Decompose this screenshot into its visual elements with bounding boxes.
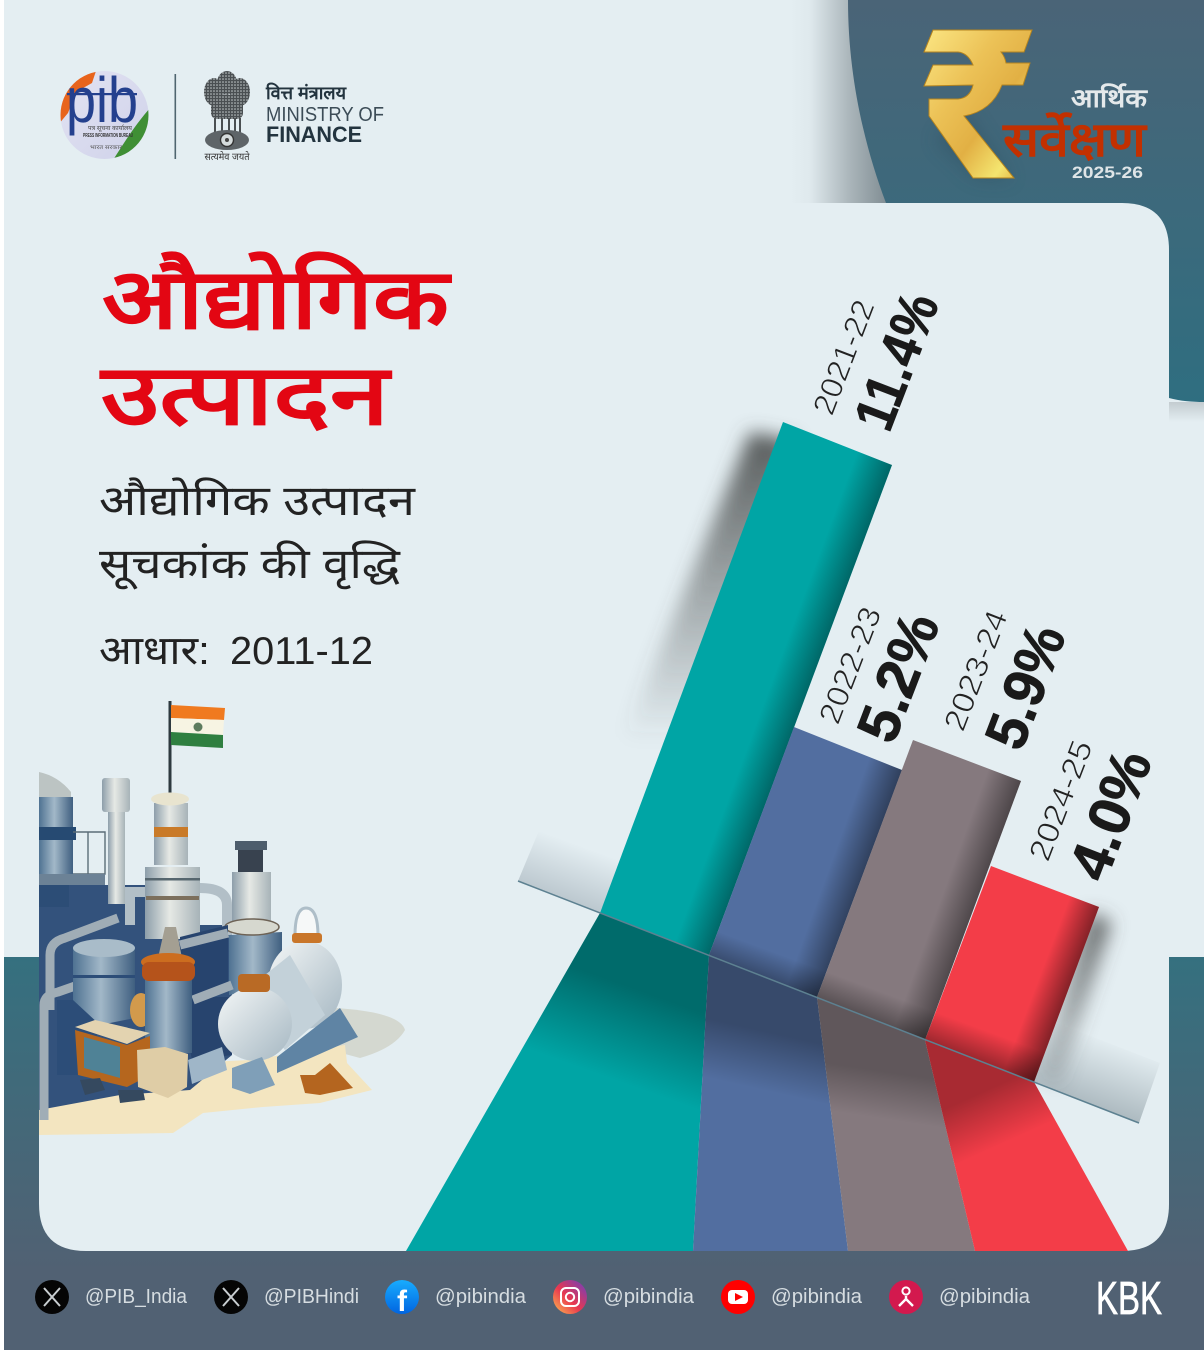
logo: PIB: पत्र सूचना कार्यालय	[88, 124, 133, 132]
base year: आधार:	[99, 629, 210, 673]
orange cloth	[300, 1063, 353, 1095]
illustration: factory with flag	[39, 701, 405, 1135]
title	[98, 251, 453, 442]
ministry name: वित्त मंत्रालय	[265, 82, 348, 103]
icon: X	[35, 1280, 69, 1314]
label: 2024-25: 2024-25	[1022, 735, 1100, 866]
pressure vessel	[218, 908, 342, 1061]
navy building	[180, 925, 232, 1060]
value: 5.9%: 5.9%	[972, 616, 1079, 758]
sand ground	[39, 1045, 372, 1135]
logo: rupee symbol	[924, 30, 1032, 180]
economic survey wordmark: आर्थिक	[1071, 83, 1148, 113]
icon: X	[214, 1280, 248, 1314]
subtitle: औद्योगिक उत्पादन	[99, 477, 416, 524]
rocks	[80, 1078, 145, 1103]
lower teal	[406, 913, 709, 1251]
lower red	[925, 1040, 1128, 1251]
ministry name: MINISTRY OF	[266, 104, 384, 126]
logo: PIB: pib	[66, 64, 138, 136]
floor shade right	[1034, 1022, 1160, 1123]
economic survey wordmark: सर्वेक्षण	[1002, 112, 1149, 167]
logo: PIB: भारत सरकार	[90, 145, 123, 151]
lower bay	[57, 1000, 97, 1075]
flag	[168, 701, 225, 799]
label: 2023-24: 2023-24	[937, 605, 1015, 736]
value: 5.2%: 5.2%	[844, 604, 952, 751]
handle: PIBHindi: @PIBHindi	[264, 1286, 359, 1308]
handle: YouTube: @pibindia	[771, 1286, 863, 1308]
right tower	[225, 841, 282, 995]
bar chart: upper bars	[600, 422, 1099, 1082]
bar 2024-25 red	[925, 866, 1099, 1082]
hut	[75, 1020, 150, 1087]
ministry name: FINANCE	[266, 122, 362, 147]
logo: PIB	[60, 71, 148, 159]
icon: Facebook: f	[397, 1285, 408, 1318]
bar 2021-22 teal	[600, 422, 892, 955]
base block	[232, 1057, 275, 1094]
logo divider	[174, 74, 176, 159]
shadow under dome strip	[1169, 402, 1204, 422]
shadow of red bar	[1040, 912, 1112, 1085]
value: 11.4%: 11.4%	[841, 283, 951, 438]
title: उत्पादन	[98, 348, 393, 442]
top right dome shadow	[812, 0, 886, 203]
rear grey pipes	[125, 888, 227, 935]
base year	[99, 629, 373, 673]
icon: YouTube	[721, 1280, 755, 1314]
ground shadow	[330, 1008, 405, 1058]
handle: Facebook: @pibindia	[435, 1286, 527, 1308]
lower blue	[693, 955, 848, 1251]
icon: Facebook	[385, 1280, 419, 1318]
handle: Instagram: @pibindia	[603, 1286, 695, 1308]
top right dome panel	[848, 0, 1204, 402]
stone block	[188, 1047, 227, 1084]
orange cap column	[130, 927, 195, 1053]
bottom band	[4, 957, 1204, 1350]
economic survey wordmark	[1002, 83, 1149, 182]
bar chart: lower projected bars	[406, 913, 1128, 1251]
bar 2022-23 blue	[709, 727, 902, 997]
icon: national emblem	[204, 71, 250, 163]
crate	[137, 1047, 188, 1098]
subtitle	[99, 477, 416, 590]
icon: Koo	[889, 1280, 923, 1314]
label: 2022-23: 2022-23	[812, 602, 888, 729]
subtitle: सूचकांक की वृद्धि	[99, 540, 400, 590]
water column	[102, 778, 130, 904]
icon: national emblem: सत्यमेव जयते	[204, 151, 250, 163]
handle: Koo: @pibindia	[939, 1286, 1031, 1308]
ministry name	[265, 82, 384, 147]
logo: PIB: PRESS INFORMATION BUREAU	[83, 133, 133, 139]
bar 2023-24 gray	[817, 740, 1021, 1040]
icon: Instagram	[553, 1280, 587, 1314]
floor shade left	[518, 780, 640, 913]
plant backdrop	[39, 885, 232, 1110]
pipes	[44, 918, 232, 1120]
footer social bar	[35, 1272, 1162, 1324]
economic survey wordmark: 2025-26	[1072, 163, 1143, 182]
label: 2021-22: 2021-22	[806, 295, 882, 420]
handle: PIB_India: @PIB_India	[85, 1286, 188, 1308]
value: 4.0%: 4.0%	[1056, 741, 1165, 889]
main rounded panel	[39, 203, 1169, 1251]
blue tank	[73, 939, 135, 1025]
KBK mark: KBK	[1096, 1272, 1162, 1324]
base year: 2011-12	[230, 630, 373, 673]
baseline	[518, 881, 1139, 1123]
lower gray	[817, 997, 975, 1251]
left tower	[39, 772, 106, 885]
shadow of teal bar	[592, 432, 795, 850]
main tower	[145, 792, 200, 939]
title: औद्योगिक	[102, 251, 453, 346]
vessel plinth	[277, 1008, 358, 1073]
